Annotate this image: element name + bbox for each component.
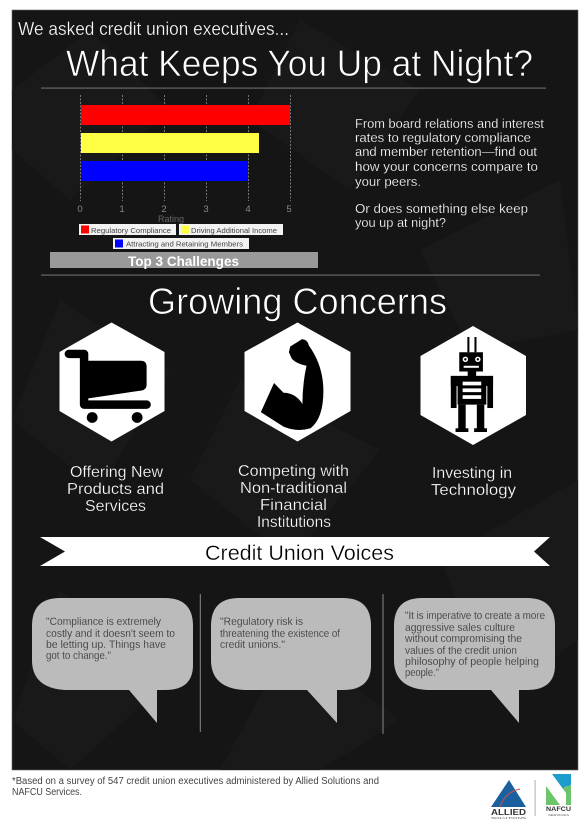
caption: investing in technology: Technology: [431, 482, 516, 499]
icon: flexed arm: [244, 322, 350, 442]
intro paragraph: Or does something else keep: [355, 201, 528, 216]
caption: offering new products and services: Services: [85, 498, 146, 515]
speech bubble: quote 3: aggressive sales culture: [405, 622, 515, 634]
caption: offering new products and services: Products and: [67, 481, 164, 498]
bar: attracting and retaining members: [81, 161, 248, 181]
ribbon banner: credit union voices: Credit Union Voices: [205, 542, 394, 565]
bar: regulatory compliance: [81, 105, 290, 125]
chart caption bar: [50, 252, 318, 269]
logo: nafcu services: NAFCU: [546, 807, 571, 813]
speech bubble: quote 1: got to change.": [46, 650, 111, 662]
footnote: NAFCU Services.: [12, 787, 82, 798]
speech bubble: quote 1: costly and it doesn't seem to: [46, 628, 175, 640]
caption: competing with non-traditional financial institutions: Non-traditional: [240, 480, 347, 497]
speech bubble: quote 2: "Regulatory risk is: [220, 616, 303, 628]
bar chart: top 3 challenges: [77, 95, 292, 249]
speech bubble: quote 3: "It is imperative to create a more: [405, 610, 545, 622]
ribbon banner: credit union voices: [40, 537, 550, 566]
caption: investing in technology: [431, 465, 516, 499]
logo: allied solutions: [491, 780, 526, 820]
heading: growing concerns: Growing Concerns: [148, 281, 447, 322]
speech bubble: quote 3: [394, 598, 555, 723]
icon: shopping cart: [60, 322, 164, 442]
footnote: [12, 776, 379, 798]
chart caption bar: Top 3 Challenges: [128, 253, 239, 269]
caption: competing with non-traditional financial institutions: Competing with: [238, 463, 349, 480]
speech bubble: quote 2: threatening the existence of: [220, 628, 341, 640]
axis tick labels: 5: [286, 204, 292, 215]
speech bubble: quote 3: people.": [405, 667, 439, 679]
caption: offering new products and services: Offering New: [70, 464, 163, 481]
speech bubble: quote 3: philosophy of people helping: [405, 656, 539, 668]
logo: allied solutions: ALLIED: [491, 807, 526, 817]
axis tick labels: 0: [77, 204, 83, 215]
axis tick labels: 4: [245, 204, 251, 215]
speech bubble: quote 2: credit unions.": [220, 639, 285, 651]
intro paragraph: your peers.: [355, 174, 421, 189]
axis tick labels: [77, 204, 292, 215]
caption: competing with non-traditional financial institutions: [238, 463, 349, 531]
legend: [79, 224, 283, 249]
icon: robot: [420, 326, 526, 445]
legend: Regulatory Compliance: [91, 226, 171, 235]
legend: Attracting and Retaining Members: [126, 240, 243, 248]
footnote: *Based on a survey of 547 credit union executives administered by Allied Solutions and: [12, 776, 379, 787]
caption: offering new products and services: [67, 464, 164, 515]
bar: driving additional income: [81, 133, 259, 153]
caption: competing with non-traditional financial institutions: Institutions: [257, 514, 331, 531]
speech bubble: quote 3: without compromising the: [404, 633, 522, 645]
intro paragraph: From board relations and interest: [355, 116, 544, 131]
intro paragraph: how your concerns compare to: [355, 159, 538, 174]
logo: allied solutions: SOLUTIONS: [491, 816, 526, 820]
intro line: We asked credit union executives...: [18, 18, 289, 39]
caption: investing in technology: Investing in: [432, 465, 512, 482]
axis tick labels: 1: [119, 204, 125, 215]
intro paragraph: [355, 116, 544, 230]
intro paragraph: and member retention—find out: [355, 144, 537, 159]
intro paragraph: rates to regulatory compliance: [355, 130, 531, 145]
legend: Driving Additional Income: [191, 226, 277, 235]
axis title: Rating: [158, 214, 184, 224]
speech bubble: quote 1: [32, 598, 193, 723]
intro paragraph: you up at night?: [355, 215, 446, 230]
title: What Keeps You Up at Night?: [66, 43, 533, 84]
logo: nafcu services: SERVICES: [548, 813, 569, 817]
logo: nafcu services: [546, 774, 571, 817]
speech bubble: quote 1: be letting up. Things have: [46, 639, 166, 651]
speech bubble: quote 1: "Compliance is extremely: [46, 616, 161, 628]
axis tick labels: 2: [161, 204, 167, 215]
axis tick labels: 3: [203, 204, 209, 215]
speech bubble: quote 3: values of the credit union: [405, 645, 517, 657]
caption: competing with non-traditional financial institutions: Financial: [260, 497, 327, 514]
speech bubble: quote 2: [211, 598, 371, 723]
